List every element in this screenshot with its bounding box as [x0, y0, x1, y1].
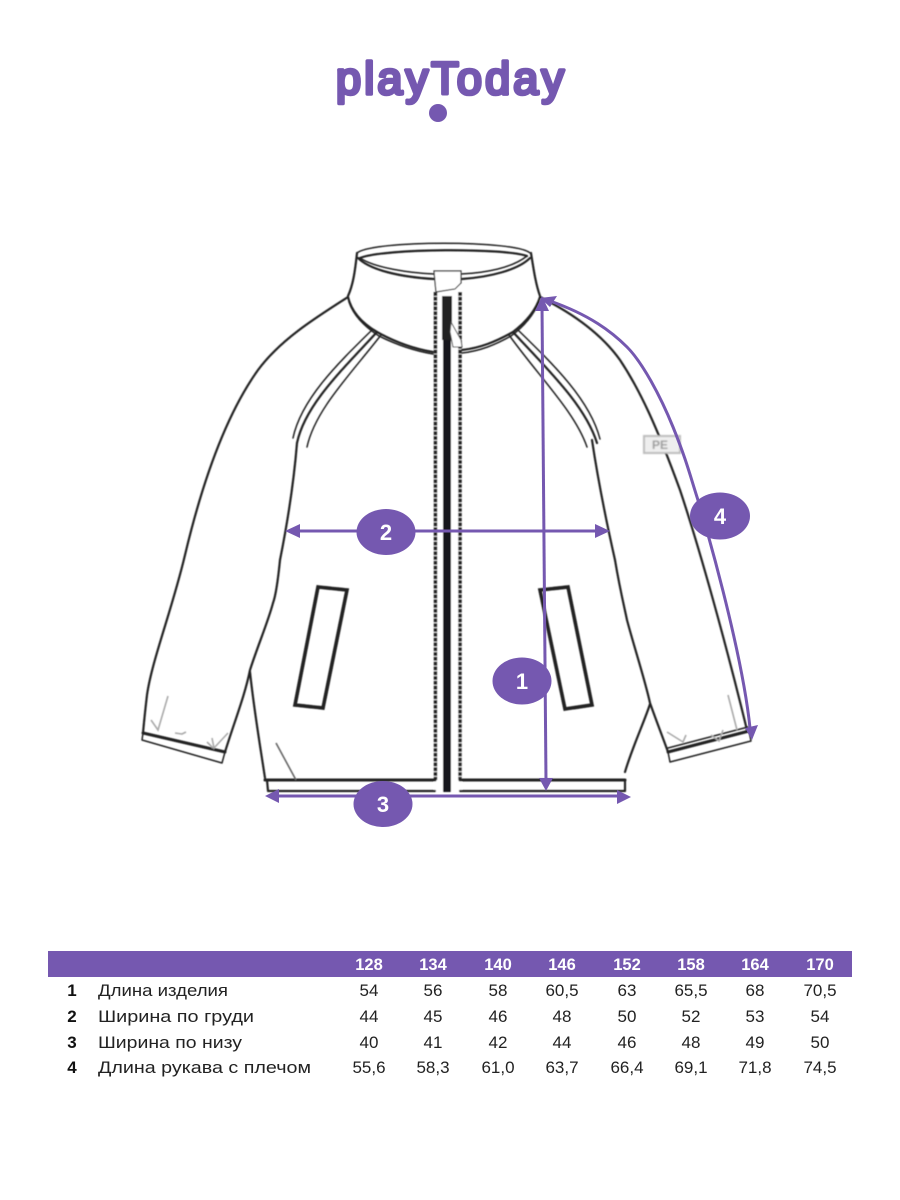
row 4: sleeve length: 61,0	[481, 1058, 515, 1077]
badge 2: 2	[380, 520, 392, 545]
row 2: chest width: Ширина по груди	[98, 1007, 254, 1026]
table header: 158	[677, 956, 705, 974]
table header: 146	[548, 956, 576, 974]
row 1: length: 54	[360, 981, 378, 1000]
row 4: sleeve length: 66,4	[610, 1058, 644, 1077]
badge 1	[492, 658, 552, 704]
row 1: length: 1	[67, 981, 77, 1000]
left pocket	[295, 587, 347, 708]
row 3: hem width: 41	[424, 1033, 442, 1052]
row 2: chest width	[67, 1007, 829, 1026]
table header: 170	[806, 956, 834, 974]
table header	[48, 951, 852, 977]
row 3: hem width: 50	[811, 1033, 829, 1052]
size table	[48, 951, 852, 1077]
badge 1: 1	[516, 669, 528, 694]
row 3: hem width	[67, 1033, 829, 1052]
right sleeve	[540, 297, 751, 762]
badge 3	[354, 781, 412, 827]
row 1: length: 60,5	[545, 981, 579, 1000]
row 4: sleeve length: 71,8	[738, 1058, 772, 1077]
row 3: hem width: 48	[682, 1033, 700, 1052]
row 2: chest width: 44	[360, 1007, 378, 1026]
row 3: hem width: Ширина по низу	[98, 1033, 243, 1052]
row 1: length: 58	[489, 981, 507, 1000]
table header: 140	[484, 956, 512, 974]
row 4: sleeve length: 58,3	[416, 1058, 450, 1077]
collar	[348, 243, 540, 354]
row 4: sleeve length: 55,6	[352, 1058, 386, 1077]
row 4: sleeve length: 69,1	[674, 1058, 708, 1077]
zipper	[434, 271, 462, 792]
row 2: chest width: 46	[489, 1007, 507, 1026]
row 4: sleeve length: 4	[67, 1058, 77, 1077]
row 1: length: 70,5	[803, 981, 837, 1000]
row 1: length: 56	[424, 981, 442, 1000]
badge 4	[690, 492, 750, 540]
row 1: length: 63	[618, 981, 636, 1000]
badge 3: 3	[377, 792, 389, 817]
row 4: sleeve length	[67, 1058, 837, 1077]
row 1: length: 65,5	[674, 981, 708, 1000]
row 2: chest width: 52	[682, 1007, 700, 1026]
row 2: chest width: 50	[618, 1007, 636, 1026]
badge 2	[356, 509, 416, 555]
badge 4: 4	[714, 504, 727, 529]
table header: 134	[419, 956, 448, 974]
row 3: hem width: 42	[489, 1033, 507, 1052]
row 3: hem width: 44	[553, 1033, 571, 1052]
row 4: sleeve length: 74,5	[803, 1058, 837, 1077]
arrow 4: sleeve length	[540, 296, 758, 740]
row 2: chest width: 48	[553, 1007, 571, 1026]
row 3: hem width: 49	[746, 1033, 764, 1052]
row 2: chest width: 2	[67, 1007, 77, 1026]
row 1: length	[67, 981, 837, 1000]
arrow 1: garment length	[535, 296, 553, 791]
row 1: length: 68	[746, 981, 764, 1000]
sleeve label: PE	[652, 438, 668, 452]
logo: playToday: playToday	[336, 53, 564, 104]
right pocket	[540, 587, 592, 709]
arrow 2: chest width	[285, 524, 610, 538]
row 3: hem width: 46	[618, 1033, 636, 1052]
arrow 3: hem width	[265, 789, 631, 804]
table header: 128	[355, 956, 383, 974]
sleeve label	[644, 436, 680, 453]
left sleeve	[142, 297, 348, 763]
row 1: length: Длина изделия	[98, 981, 228, 1000]
row 3: hem width: 40	[360, 1033, 378, 1052]
row 4: sleeve length: Длина рукава с плечом	[98, 1058, 311, 1077]
body	[250, 330, 650, 791]
table header: 152	[613, 956, 641, 974]
row 4: sleeve length: 63,7	[545, 1058, 579, 1077]
row 2: chest width: 45	[424, 1007, 442, 1026]
row 2: chest width: 53	[746, 1007, 764, 1026]
row 2: chest width: 54	[811, 1007, 829, 1026]
row 3: hem width: 3	[67, 1033, 77, 1052]
table header: 164	[741, 956, 770, 974]
jacket technical drawing	[142, 243, 751, 792]
